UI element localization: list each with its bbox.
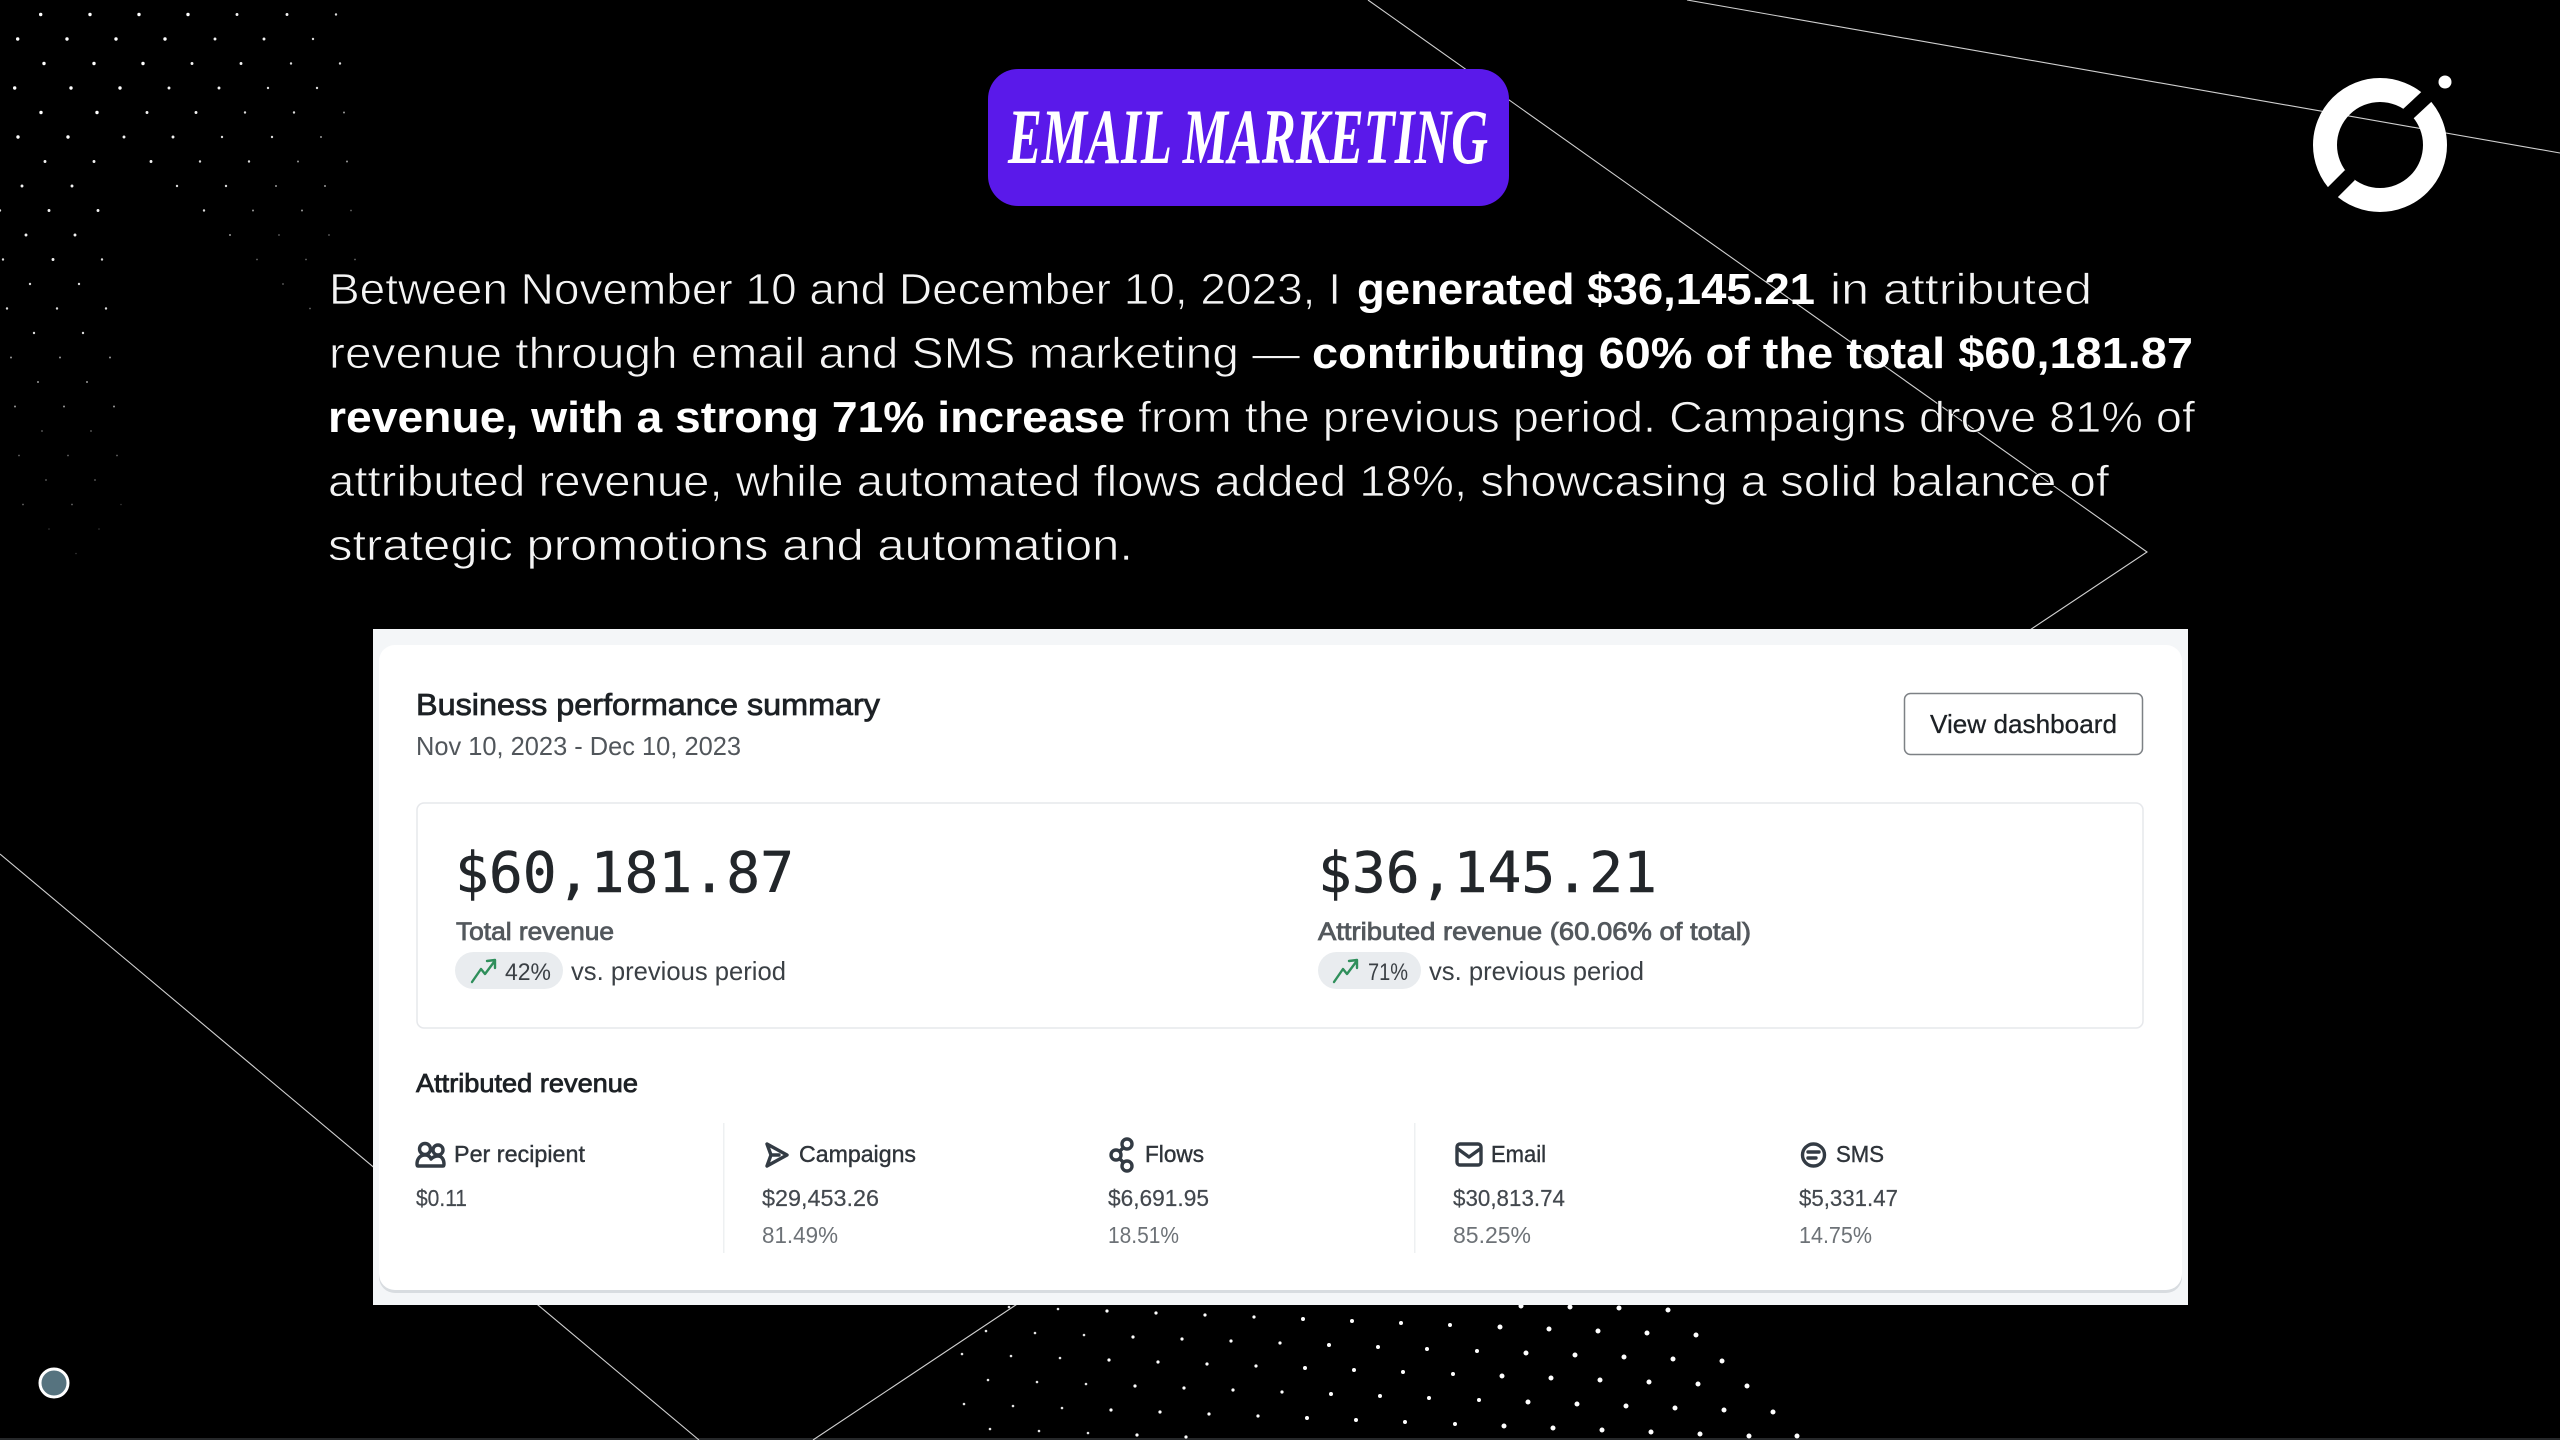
metric: flows	[1108, 1139, 1209, 1248]
metric: sms: 14.75%	[1799, 1222, 1872, 1248]
icon: people	[417, 1144, 444, 1166]
metric: sms: SMS	[1836, 1141, 1884, 1167]
icon: flow nodes	[1111, 1139, 1132, 1171]
view dashboard button: View dashboard	[1930, 709, 2117, 739]
metric: flows: Flows	[1145, 1141, 1204, 1167]
attributed revenue stat: $36,145.21	[1318, 841, 1657, 906]
attributed revenue stat: Attributed revenue (60.06% of total)	[1318, 918, 1751, 946]
total revenue stat: Total revenue	[456, 918, 614, 946]
intro paragraph: from the previous period. Campaigns drove 81% of	[1138, 393, 2196, 442]
title text: EMAIL MARKETING	[1007, 93, 1488, 180]
dot pattern: bottom centre	[962, 1306, 1797, 1437]
icon: chat bubble	[1802, 1144, 1824, 1166]
attributed revenue heading: Attributed revenue	[416, 1068, 638, 1098]
metric: email: 85.25%	[1453, 1222, 1531, 1248]
metric: email	[1453, 1141, 1565, 1248]
view dashboard button	[1904, 694, 2142, 754]
metric: email: Email	[1491, 1141, 1546, 1167]
intro paragraph	[328, 265, 2196, 570]
metric: campaigns: Campaigns	[799, 1141, 916, 1167]
metric: per recipient: Per recipient	[454, 1141, 586, 1167]
total revenue stat: 42%	[505, 959, 551, 986]
dashboard heading: Business performance summary	[416, 687, 881, 722]
total revenue stat: vs. previous period	[571, 956, 786, 986]
intro paragraph: in attributed	[1830, 265, 2092, 314]
intro paragraph: attributed revenue, while automated flows added 18%, showcasing a solid balance of	[328, 457, 2110, 506]
title badge	[988, 69, 1509, 206]
icon: send arrow	[767, 1144, 787, 1166]
dashboard screenshot panel	[373, 629, 2188, 1305]
attributed revenue stat: vs. previous period	[1429, 956, 1644, 986]
metric: campaigns	[762, 1141, 916, 1248]
intro paragraph: Between November 10 and December 10, 2023, I	[329, 265, 1341, 314]
slide indicator dot	[40, 1369, 68, 1397]
date range: Nov 10, 2023 - Dec 10, 2023	[416, 731, 741, 761]
metric: campaigns: $29,453.26	[762, 1185, 879, 1211]
total revenue stat: $60,181.87	[455, 841, 794, 906]
metric: campaigns: 81.49%	[762, 1222, 838, 1248]
metric: per recipient	[416, 1141, 586, 1211]
intro paragraph: contributing 60% of the total $60,181.87	[1312, 329, 2193, 378]
dot pattern: top left	[0, 14, 355, 554]
intro paragraph: strategic promotions and automation.	[328, 521, 1133, 570]
metric: sms: $5,331.47	[1799, 1185, 1898, 1211]
metric: email: $30,813.74	[1453, 1185, 1565, 1211]
icon: logo ring	[2321, 76, 2452, 204]
metric: flows: 18.51%	[1108, 1222, 1179, 1248]
metric: per recipient: $0.11	[416, 1185, 467, 1211]
metric: sms	[1799, 1141, 1898, 1248]
intro paragraph: revenue through email and SMS marketing —	[329, 329, 1300, 378]
intro paragraph: revenue, with a strong 71% increase	[328, 393, 1125, 442]
attributed revenue stat	[1318, 841, 1751, 989]
total revenue stat	[455, 841, 794, 989]
icon: envelope	[1457, 1144, 1481, 1165]
attributed revenue stat: 71%	[1368, 959, 1408, 986]
intro paragraph: generated $36,145.21	[1357, 265, 1815, 314]
revenue summary box	[417, 803, 2143, 1028]
metric: flows: $6,691.95	[1108, 1185, 1209, 1211]
